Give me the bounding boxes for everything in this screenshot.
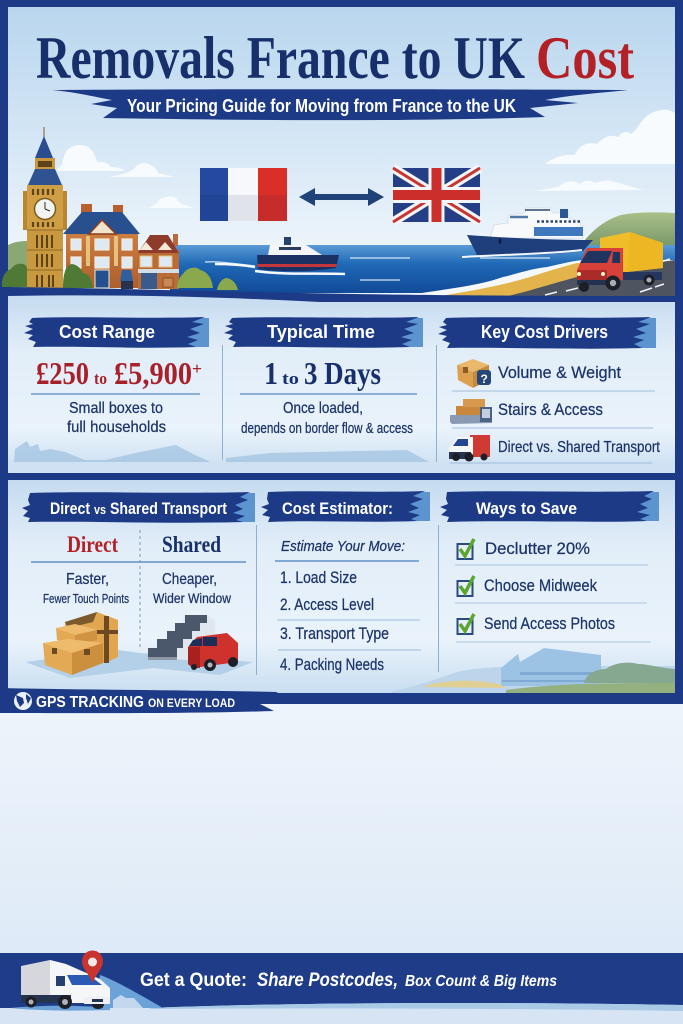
cost range caption: Small boxes to (69, 400, 163, 417)
column dividers (222, 345, 436, 462)
heading: Direct vs Shared Transport (22, 492, 255, 523)
shadow under illustrations (25, 650, 253, 678)
heading: Key Cost Drivers: Key Cost Drivers (481, 322, 608, 342)
icon: box with question mark (457, 359, 491, 388)
GPS text: GPS TRACKING (36, 694, 144, 711)
saving tip: Midweek: Choose Midweek (484, 576, 597, 595)
heading: Cost Range: Cost Range (59, 322, 155, 342)
footer call to action (0, 951, 683, 1011)
arrow: two-way between flags (299, 188, 384, 206)
subtitle banner: Your Pricing Guide for Moving from France to the UK (127, 96, 516, 116)
direct benefits: Faster, (66, 571, 109, 588)
hill right (585, 212, 675, 263)
price range figure: to (94, 369, 107, 388)
estimator list: 2. Access Level (280, 596, 374, 614)
icon: large ferry (462, 208, 593, 257)
navy frame (0, 0, 683, 704)
icon: cardboard boxes (43, 612, 118, 675)
typical time figure (264, 355, 381, 391)
icon: brick houses (63, 204, 179, 289)
icon: stairs and red van (148, 615, 238, 671)
panel: options (8, 480, 675, 693)
icon: box with question mark: ? (480, 372, 488, 386)
comparison column titles: Shared (162, 532, 221, 557)
typical time figure: 3 Days (304, 355, 381, 391)
saving tip: Declutter: Declutter 20% (485, 539, 590, 558)
cost range caption (67, 400, 166, 436)
price range figure: £250 (36, 355, 89, 391)
heading: Ways to Save: Ways to Save (476, 499, 577, 518)
typical time figure: 1 (264, 355, 278, 391)
estimator list: 1. Load Size (280, 569, 357, 587)
price range figure: + (192, 359, 202, 378)
driver: Volume & Weight: Volume & Weight (498, 363, 621, 382)
heading: Cost Range (24, 317, 209, 348)
comparison column titles (67, 532, 221, 557)
comparison column titles: Direct (67, 532, 118, 557)
direct benefits (43, 571, 129, 606)
heading: Key Cost Drivers (438, 317, 656, 349)
quote text: Get a Quote: (140, 970, 247, 991)
clouds (55, 110, 675, 208)
page background (0, 704, 683, 1024)
icon: boxes on stairs (450, 399, 492, 424)
price range figure (36, 355, 202, 391)
icon: Big Ben clock tower (23, 127, 67, 288)
icon: UK flag (393, 168, 480, 222)
GPS tracking banner: ON EVERY LOAD (148, 696, 235, 710)
footer call to action: Share Postcodes, (257, 970, 398, 991)
heading: Direct vs Shared Transport: Direct vs Shared Transport (50, 499, 227, 518)
bushes (63, 264, 238, 290)
estimator subheading: Estimate Your Move: (281, 538, 405, 555)
shared benefits: Cheaper, (162, 571, 217, 588)
mountains: time column (226, 450, 429, 462)
estimator list: 3. Transport Type (280, 625, 389, 643)
price range figure: £5,900 (114, 355, 192, 391)
direct benefits: Fewer Touch Points (43, 591, 129, 606)
left hill and bushes behind buildings (2, 241, 28, 287)
typical time caption: Once loaded, (283, 400, 363, 417)
driver: Stairs & Access: Stairs & Access (498, 400, 603, 419)
title accent word: Cost (536, 25, 634, 91)
column dividers (256, 525, 438, 675)
typical time caption (241, 400, 413, 437)
hero bottom wave (8, 287, 675, 304)
underline (31, 393, 200, 395)
estimator list (280, 569, 389, 674)
typical time figure: to (282, 369, 299, 388)
icon: French flag (200, 168, 287, 221)
check: Midweek (458, 576, 474, 596)
icon: red map pin (82, 951, 103, 983)
shared benefits (153, 571, 232, 606)
shared benefits: Wider Window (153, 590, 232, 606)
saving tip: Photos: Send Access Photos (484, 614, 615, 633)
mountains: cost column (14, 441, 209, 463)
panel: cost summary (8, 295, 675, 473)
landscape with warehouse (392, 648, 675, 693)
typical time caption: depends on border flow & access (241, 420, 413, 437)
estimator list: 4. Packing Needs (280, 656, 384, 674)
hill behind truck (95, 975, 163, 1008)
heading: Cost Estimator (261, 491, 430, 522)
icon: delivery truck (21, 960, 110, 1009)
beach and road (405, 260, 675, 296)
heading: Cost Estimator: Cost Estimator: (282, 499, 393, 518)
cost range caption: full households (67, 419, 166, 436)
icon: white and red van (449, 435, 490, 462)
footer call to action: Box Count & Big Items (405, 973, 557, 990)
heading: Typical Time (224, 317, 423, 348)
subtitle banner (52, 89, 628, 120)
icon: small ferry (215, 237, 345, 274)
title: Removals France to UK (36, 25, 525, 91)
panel: hero scene (8, 7, 675, 296)
icon: GPS globe (14, 692, 32, 710)
heading: Ways to Save (440, 491, 659, 522)
heading: Typical Time: Typical Time (267, 322, 375, 342)
savings list (455, 539, 651, 642)
icon: red truck with yellow box (577, 232, 663, 292)
check: Declutter (458, 539, 474, 559)
sea (170, 245, 675, 293)
check: Photos (458, 614, 474, 634)
GPS tracking banner (0, 688, 278, 713)
